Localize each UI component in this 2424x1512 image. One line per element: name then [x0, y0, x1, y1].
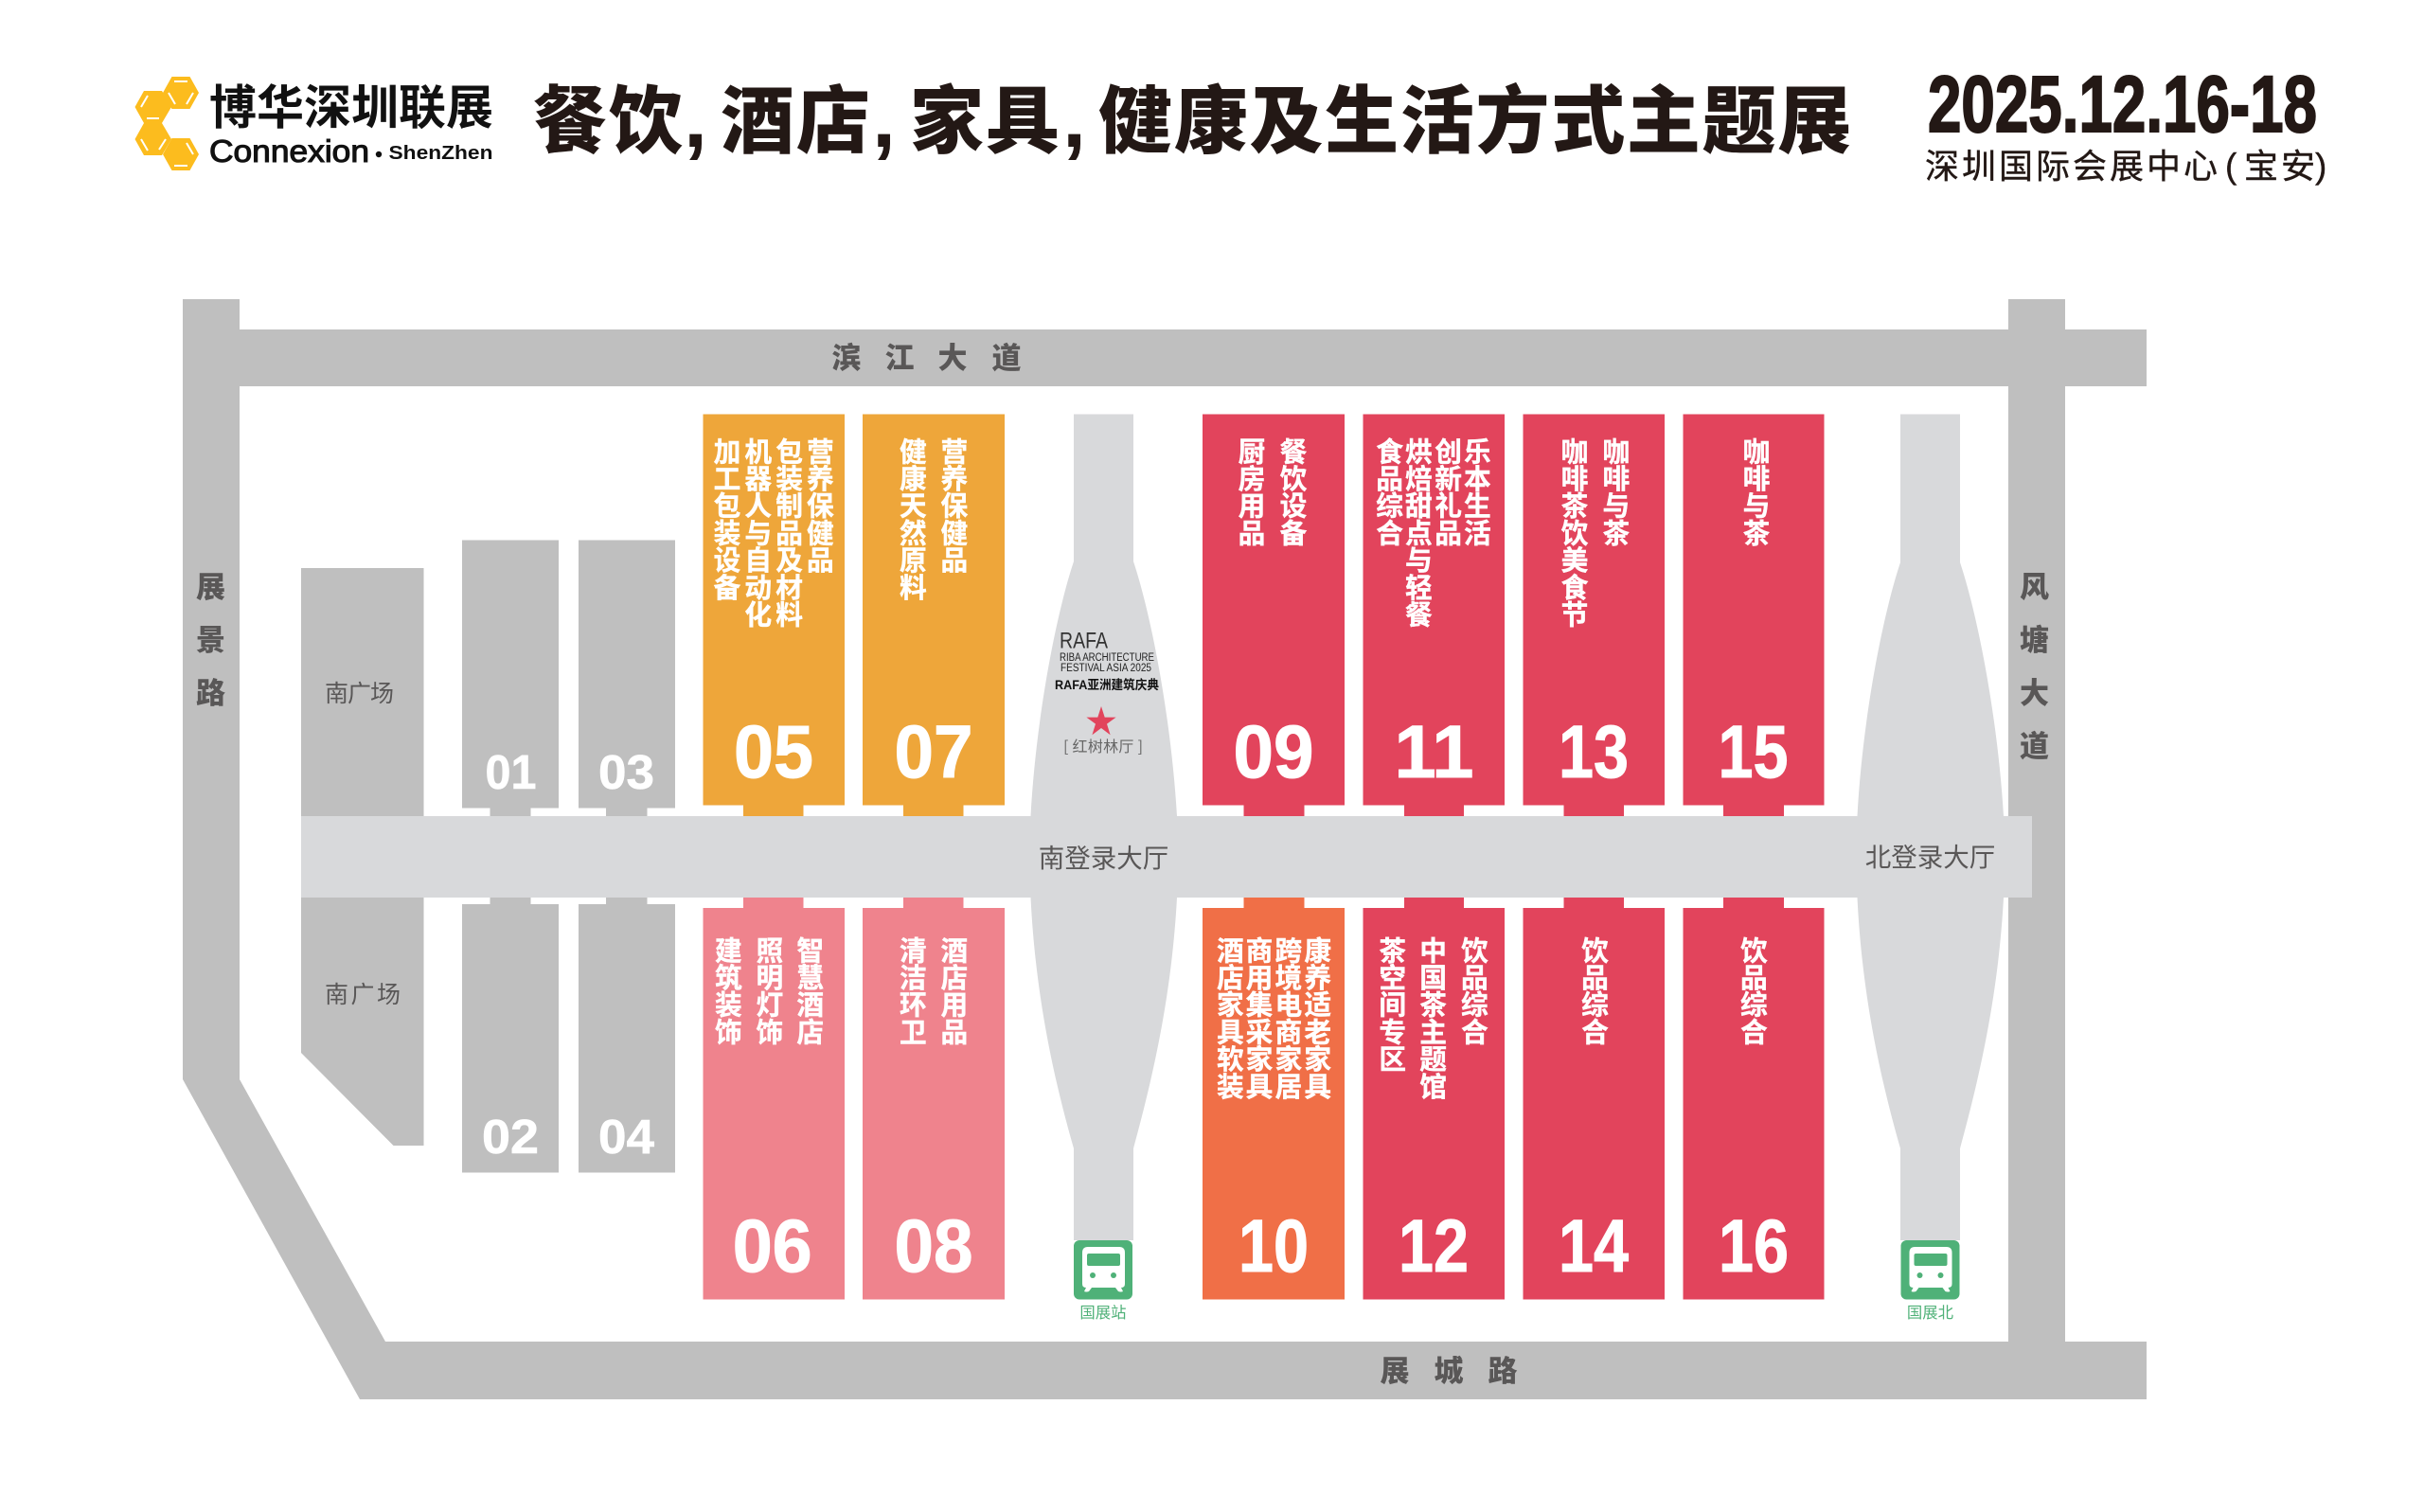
label: Fengtang Ave: 道	[2020, 722, 2049, 765]
road: Fengtang Ave	[2008, 299, 2065, 1342]
hall 06: 建筑装饰	[709, 936, 748, 1045]
hall 14	[1523, 898, 1665, 1299]
logo name English: Connexion	[209, 133, 369, 169]
hall 11	[1364, 415, 1505, 816]
hall 10: 跨境电商家居	[1269, 936, 1308, 1099]
south plaza upper	[301, 568, 424, 816]
hall 07	[863, 415, 1005, 816]
hall 05: 05	[734, 709, 813, 793]
hall 10: 酒店家具软装	[1211, 936, 1250, 1099]
hall 11: 11	[1394, 709, 1473, 793]
hall 06: 06	[733, 1203, 812, 1288]
label: Binjiang Ave: 道	[992, 334, 1021, 377]
title: ,	[1062, 71, 1088, 166]
road network	[183, 299, 2147, 1399]
label: Binjiang Ave: 大	[937, 334, 968, 377]
road: Zhanjing Rd and Zhancheng Rd	[183, 299, 2147, 1399]
hall 13: 咖啡与茶	[1596, 437, 1635, 546]
hall 10: 商用集采家具	[1240, 936, 1278, 1099]
hall 07: 健康天然原料	[894, 437, 933, 600]
hall 12: 中国茶主题馆	[1414, 936, 1453, 1099]
hall 06: 智慧酒店	[791, 936, 829, 1045]
label: Binjiang Ave: 滨	[831, 334, 862, 377]
title: ,	[872, 71, 898, 166]
title: 家具	[910, 62, 1060, 169]
hall 05: 营养保健品	[801, 437, 840, 574]
hall 13	[1523, 415, 1665, 816]
icon: honeycomb hexagons	[134, 77, 199, 170]
hall 09: 餐饮设备	[1274, 437, 1312, 546]
hall 08	[863, 898, 1005, 1299]
hall 09: 09	[1233, 709, 1314, 793]
north lobby bottle shape	[1858, 415, 2004, 1240]
hall 09: 厨房用品	[1233, 437, 1271, 546]
label: Fengtang Ave: 塘	[2020, 616, 2049, 659]
main concourse hall	[301, 816, 2032, 898]
venue: 宝安	[2244, 139, 2318, 188]
hall 10: 10	[1239, 1203, 1309, 1288]
south plaza lower	[301, 898, 424, 1146]
hall 03	[579, 540, 675, 816]
venue: (	[2225, 147, 2237, 186]
label: south plaza: 南广场	[325, 976, 401, 1010]
label: south plaza: 南广场	[325, 675, 394, 709]
hall 08: 清洁环卫	[894, 936, 933, 1045]
label: south registration hall: 南登录大厅	[1039, 837, 1168, 875]
icon: red star	[1086, 706, 1116, 735]
hall 14: 饮品综合	[1576, 936, 1614, 1045]
label: Zhancheng Rd: 城	[1434, 1347, 1464, 1390]
venue: 深圳国际会展中心	[1925, 139, 2220, 188]
label: Zhanjing Rd: 景	[196, 616, 225, 659]
title: 餐饮	[533, 62, 684, 169]
hall 06: 照明灯饰	[750, 936, 789, 1045]
label: metro station north: 国展北	[1907, 1300, 1953, 1323]
hall 08: 酒店用品	[935, 936, 973, 1045]
logo separator dot	[376, 151, 382, 157]
hall 01	[462, 540, 559, 816]
label: Binjiang Ave: 江	[884, 334, 915, 377]
hall 04: 04	[598, 1110, 655, 1164]
venue: )	[2315, 147, 2326, 186]
label: Zhancheng Rd: 路	[1488, 1347, 1517, 1390]
hall 12	[1364, 898, 1505, 1299]
RAFA Chinese name: RAFA亚洲建筑庆典	[1055, 677, 1159, 692]
label: metro station south: 国展站	[1079, 1300, 1127, 1323]
road: Binjiang Ave	[240, 329, 2147, 386]
hall 13: 咖啡茶饮美食节	[1555, 437, 1595, 628]
hall 16: 16	[1719, 1203, 1789, 1288]
RAFA full name line 2: FESTIVAL ASIA 2025	[1060, 661, 1151, 674]
RAFA event callout	[1055, 629, 1159, 756]
hall 11: 食品综合	[1370, 437, 1409, 546]
hall 10	[1203, 898, 1345, 1299]
label: north registration hall: 北登录大厅	[1865, 836, 1995, 874]
hall 04	[579, 898, 675, 1172]
hall 11: 烘焙甜点与轻餐	[1399, 437, 1438, 628]
hall 07: 07	[894, 709, 973, 793]
icon: metro station north	[1901, 1240, 1960, 1299]
hall 12: 饮品综合	[1455, 936, 1494, 1045]
hall 02: 02	[482, 1110, 539, 1164]
label: Zhanjing Rd: 路	[196, 669, 225, 712]
label: mangrove hall: [ 红树林厅 ]	[1063, 734, 1143, 756]
hall 12: 12	[1399, 1203, 1469, 1288]
label: Fengtang Ave: 大	[2020, 669, 2049, 712]
header logo: Connexion ShenZhen	[134, 70, 493, 170]
hall 02	[462, 898, 559, 1172]
hall 05: 包装制品及材料	[770, 437, 809, 628]
hall 06	[703, 898, 845, 1299]
title: ,	[684, 71, 709, 166]
hall 11: 乐本生活	[1458, 437, 1497, 546]
hall 05: 加工包装设备	[708, 437, 746, 600]
hall 05	[703, 415, 845, 816]
logo city name: ShenZhen	[388, 142, 492, 164]
label: Zhanjing Rd: 展	[196, 563, 225, 606]
hall 16	[1684, 898, 1824, 1299]
hall 09	[1203, 415, 1345, 816]
hall 13: 13	[1559, 709, 1629, 793]
hall 03: 03	[598, 745, 654, 799]
hall 01: 01	[485, 745, 536, 799]
hall 08: 08	[894, 1203, 973, 1288]
title: 酒店	[721, 62, 871, 169]
hall 05: 机器人与自动化	[739, 437, 777, 628]
hall 16: 饮品综合	[1735, 936, 1773, 1045]
south lobby bottle shape	[1030, 415, 1177, 1240]
hall 11: 创新礼品	[1429, 437, 1468, 546]
RAFA full name line 1: RIBA ARCHITECTURE	[1060, 650, 1154, 664]
hall 10: 康养适老家具	[1298, 936, 1337, 1099]
label: Zhancheng Rd: 展	[1381, 1347, 1409, 1390]
icon: metro station south	[1074, 1240, 1132, 1299]
RAFA logotype: RAFA	[1060, 629, 1109, 653]
label: Fengtang Ave: 风	[2020, 563, 2049, 606]
hall 12: 茶空间专区	[1373, 936, 1412, 1072]
hall 07: 营养保健品	[935, 437, 973, 574]
hall 14: 14	[1559, 1203, 1629, 1288]
hall 15: 咖啡与茶	[1737, 437, 1776, 546]
title: 健康及生活方式主题展	[1098, 62, 1853, 169]
hall 15	[1684, 415, 1824, 816]
logo name Chinese: 博华深圳联展	[209, 70, 493, 138]
hall 15: 15	[1718, 709, 1788, 793]
